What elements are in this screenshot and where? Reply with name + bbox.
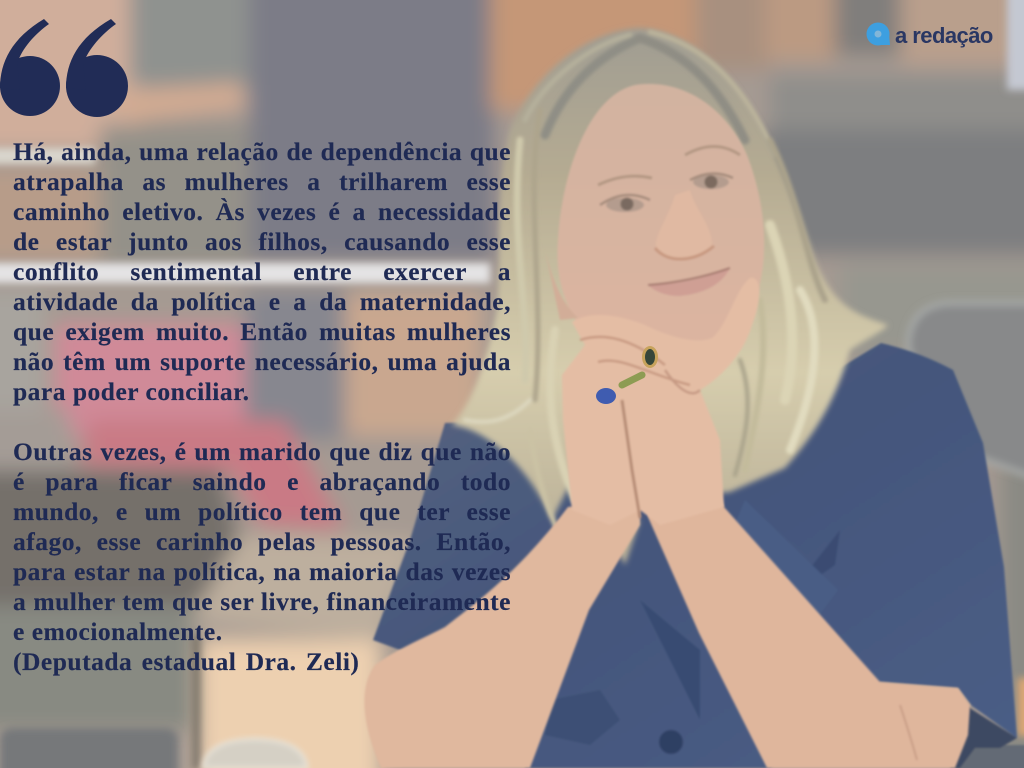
glass on table <box>203 739 307 768</box>
quote text: e emocionalmente. <box>13 617 223 646</box>
quote text: que exigem muito. Então muitas mulheres <box>13 317 511 346</box>
woman: arms <box>364 470 970 768</box>
quote text: Há, ainda, uma relação de dependência que <box>13 137 511 166</box>
quote text: não têm um suporte necessário, uma ajuda <box>13 347 511 376</box>
quote text: atividade da política e a da maternidade, <box>13 287 511 316</box>
quote text: Outras vezes, é um marido que diz que não <box>13 437 511 466</box>
logo: a redação: a redação <box>895 23 993 48</box>
woman: hair <box>452 28 888 565</box>
eyes <box>598 146 740 212</box>
nose <box>656 190 712 259</box>
quote text <box>13 137 511 676</box>
woman: clasped hands <box>562 278 759 525</box>
quote text: para estar na política, na maioria das vezes <box>13 557 511 586</box>
woman: face <box>545 84 764 360</box>
rings <box>596 346 658 404</box>
quote text: conflito sentimental entre exercer a <box>13 257 511 286</box>
quote text: (Deputada estadual Dra. Zeli) <box>13 647 359 676</box>
quote text: é para ficar saindo e abraçando todo <box>13 467 511 496</box>
quote text: caminho eletivo. Às vezes é a necessidade <box>13 197 511 226</box>
quote text: mundo, e um político tem que ter esse <box>13 497 511 526</box>
icon: quotation mark <box>0 19 128 117</box>
quote text: de estar junto aos filhos, causando esse <box>13 227 511 256</box>
mouth <box>648 268 730 296</box>
hair strands <box>465 32 825 525</box>
quote text: a mulher tem que ser livre, financeiramente <box>13 587 511 616</box>
woman: shirt <box>373 343 1024 768</box>
quote text: atrapalha as mulheres a trilharem esse <box>13 167 511 196</box>
quote text: afago, esse carinho pelas pessoas. Então, <box>13 527 511 556</box>
quote text: para poder conciliar. <box>13 377 249 406</box>
